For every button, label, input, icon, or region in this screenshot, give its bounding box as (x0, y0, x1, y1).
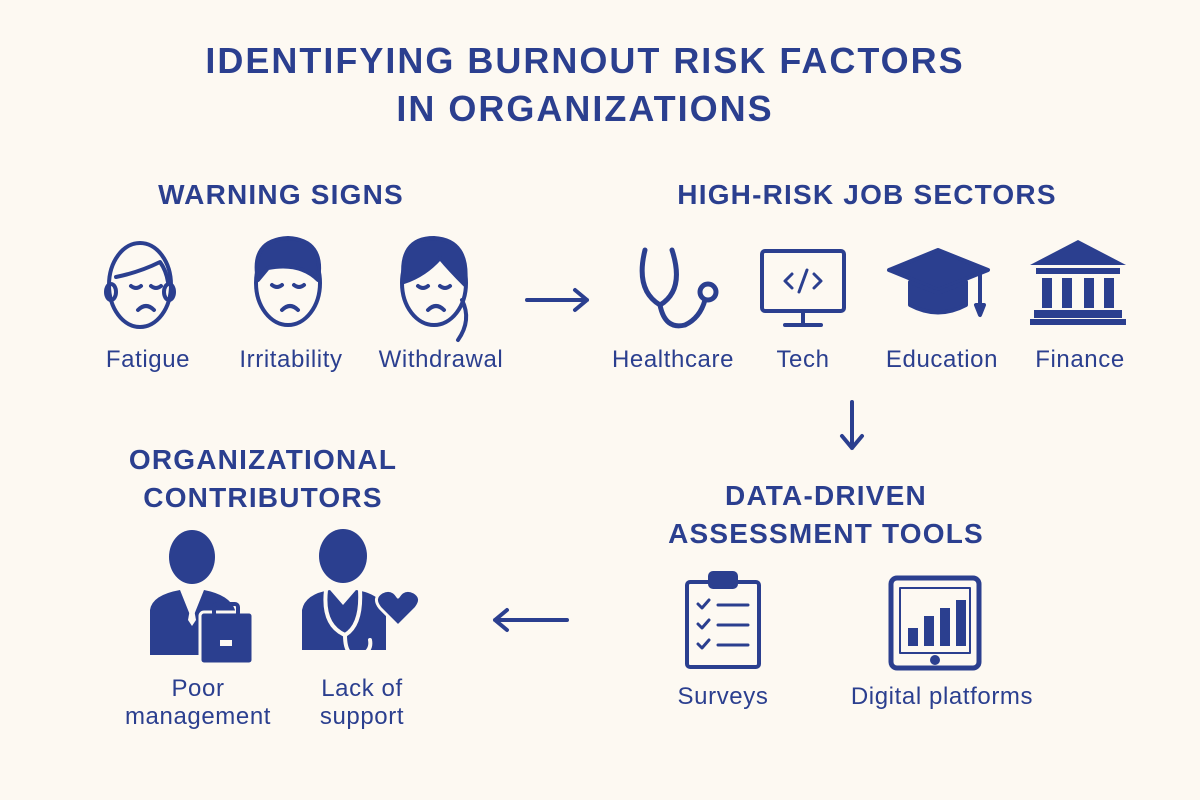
icon: irritability face (256, 238, 320, 325)
title: IN ORGANIZATIONS (396, 88, 774, 129)
heading: data-driven assessment tools (668, 480, 984, 549)
label: withdrawal: Withdrawal (379, 346, 503, 373)
label: healthcare: Healthcare (612, 346, 734, 373)
icon: bank (1030, 240, 1126, 325)
icon: doctor with heart (302, 529, 420, 656)
heading: high-risk job sectors: HIGH-RISK JOB SECTORS (677, 179, 1057, 210)
icon: manager with briefcase (150, 530, 253, 664)
icon: stethoscope (642, 250, 716, 326)
heading: organizational contributors: ORGANIZATIONAL (129, 444, 397, 475)
title (205, 40, 965, 129)
label: lack of support: support (320, 703, 404, 730)
label: tech: Tech (776, 346, 830, 373)
label: finance: Finance (1035, 346, 1125, 373)
label: poor management (125, 675, 271, 730)
icon: withdrawal face (402, 238, 466, 340)
label: irritability: Irritability (239, 346, 343, 373)
icon: tablet (891, 578, 979, 668)
icon: monitor (762, 251, 844, 325)
label: lack of support: Lack of (321, 675, 403, 702)
heading: data-driven assessment tools: DATA-DRIVEN (725, 480, 927, 511)
title: IDENTIFYING BURNOUT RISK FACTORS (205, 40, 965, 81)
arrow: left (495, 610, 567, 630)
arrow: down (842, 402, 862, 448)
label: digital platforms: Digital platforms (851, 683, 1033, 710)
label: lack of support (320, 675, 404, 730)
icon: graduation cap (889, 250, 988, 315)
label: poor management: management (125, 703, 271, 730)
icon: fatigue face (106, 243, 174, 327)
heading: organizational contributors: CONTRIBUTORS (143, 482, 383, 513)
label: education: Education (886, 346, 998, 373)
label: surveys: Surveys (678, 683, 768, 710)
heading: organizational contributors (129, 444, 397, 513)
heading: warning signs: WARNING SIGNS (158, 179, 404, 210)
heading: data-driven assessment tools: ASSESSMENT TOOLS (668, 518, 984, 549)
arrow: right (527, 290, 587, 310)
label: fatigue: Fatigue (106, 346, 190, 373)
icon: clipboard (687, 573, 759, 667)
label: poor management: Poor (171, 675, 225, 702)
